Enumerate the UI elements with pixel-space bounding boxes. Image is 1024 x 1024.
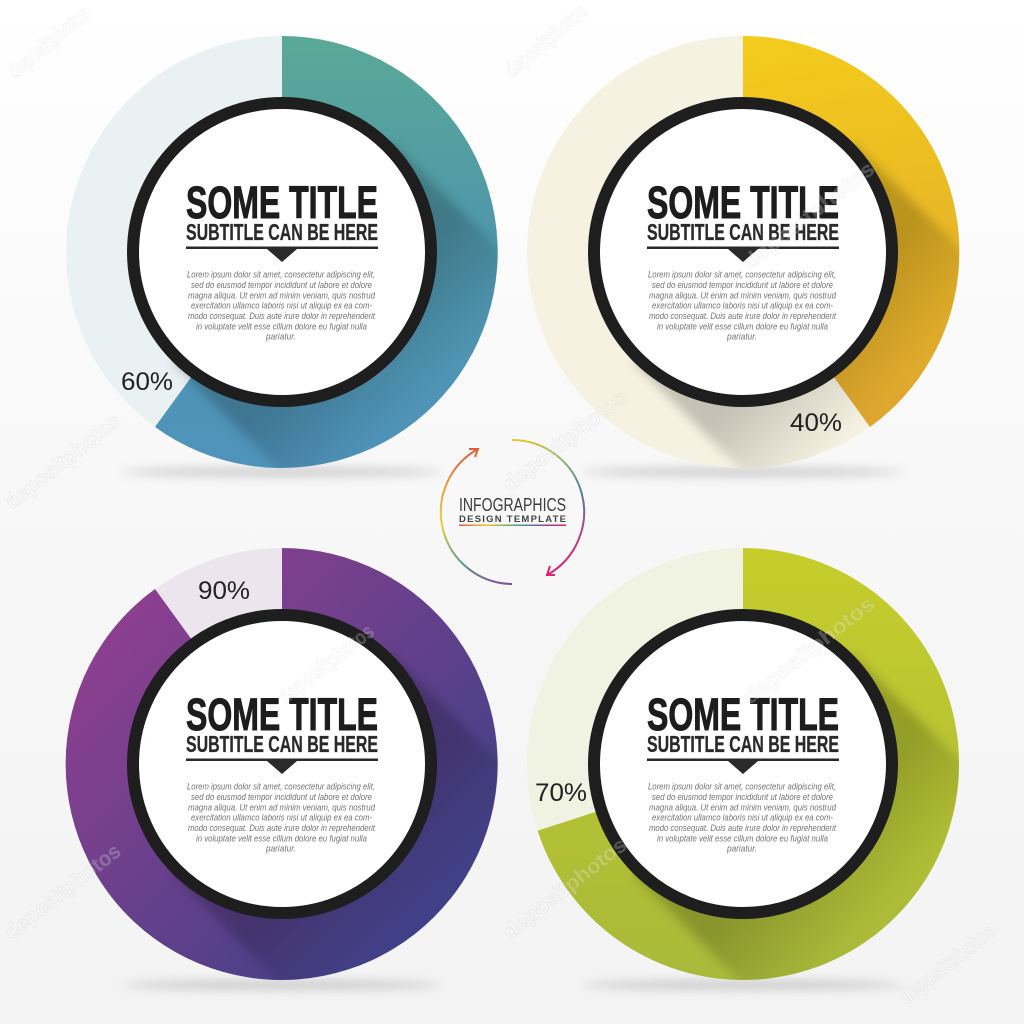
title: SOME TITLE bbox=[647, 177, 839, 228]
ground shadow: top left bbox=[122, 468, 442, 476]
title: SOME TITLE bbox=[186, 689, 378, 740]
watermarks: depositphotos bbox=[739, 592, 879, 709]
inner circle bbox=[133, 103, 431, 401]
body text: Lorem ipsum dolor sit amet, consectetur adipiscing elit, bbox=[648, 270, 836, 280]
ground shadow: bottom left bbox=[122, 981, 442, 989]
panel: 90% donut bbox=[66, 548, 498, 980]
body text: Lorem ipsum dolor sit amet, consectetur adipiscing elit, bbox=[187, 270, 375, 280]
track bbox=[527, 36, 959, 468]
body text bbox=[187, 782, 376, 854]
pointer rule bbox=[647, 246, 839, 262]
subtitle: SUBTITLE CAN BE HERE bbox=[647, 731, 839, 757]
body text: magna aliqua. Ut enim ad minim veniam, quis nostrud bbox=[188, 290, 376, 300]
percent label: 60% bbox=[121, 368, 173, 396]
body text: pariatur. bbox=[265, 332, 296, 342]
pointer rule bbox=[186, 246, 378, 262]
title: SOME TITLE bbox=[186, 177, 378, 228]
track bbox=[66, 548, 498, 980]
pointer rule bbox=[186, 758, 378, 774]
title: SOME TITLE bbox=[647, 689, 839, 740]
body text: exercitation ullamco laboris nisi ut aliquip ex ea com- bbox=[191, 301, 372, 311]
arrow: right arc bbox=[512, 440, 584, 575]
center badge bbox=[441, 440, 584, 584]
body text: pariatur. bbox=[726, 844, 757, 854]
percent label: 90% bbox=[198, 577, 250, 605]
inner circle bbox=[594, 615, 892, 913]
body text: modo consequat. Duis aute irure dolor in reprehenderit bbox=[188, 311, 375, 321]
watermarks: depositphotos bbox=[274, 620, 379, 709]
body text: sed do eiusmod tempor incididunt ut labore et dolore bbox=[652, 792, 833, 802]
arrow: left arc bbox=[441, 449, 512, 584]
track bbox=[527, 548, 959, 980]
body text: modo consequat. Duis aute irure dolor in reprehenderit bbox=[649, 311, 836, 321]
long shadow bbox=[173, 655, 498, 980]
long shadow bbox=[170, 142, 498, 468]
inner circle bbox=[133, 615, 431, 913]
body text: modo consequat. Duis aute irure dolor in reprehenderit bbox=[188, 823, 375, 833]
body text: magna aliqua. Ut enim ad minim veniam, quis nostrud bbox=[649, 290, 837, 300]
watermarks: depositphotos bbox=[895, 920, 1000, 1009]
watermarks: depositphotos bbox=[1, 410, 125, 514]
inner circle bbox=[594, 103, 892, 401]
body text: magna aliqua. Ut enim ad minim veniam, quis nostrud bbox=[188, 802, 376, 812]
body text: exercitation ullamco laboris nisi ut aliquip ex ea com- bbox=[191, 813, 372, 823]
subtitle: SUBTITLE CAN BE HERE bbox=[647, 219, 839, 245]
watermarks: depositphotos bbox=[499, 385, 631, 496]
body text: sed do eiusmod tempor incididunt ut labore et dolore bbox=[191, 792, 372, 802]
body text: sed do eiusmod tempor incididunt ut labore et dolore bbox=[652, 280, 833, 290]
track bbox=[66, 36, 498, 468]
body text: Lorem ipsum dolor sit amet, consectetur adipiscing elit, bbox=[648, 782, 836, 792]
watermarks: depositphotos bbox=[1, 840, 125, 944]
value wedge 90% bbox=[66, 548, 498, 980]
body text: in voluptate velit esse cillum dolore eu fugiat nulla bbox=[196, 321, 367, 331]
body text: modo consequat. Duis aute irure dolor in reprehenderit bbox=[649, 823, 836, 833]
body text: in voluptate velit esse cillum dolore eu fugiat nulla bbox=[196, 833, 367, 843]
badge title: INFOGRAPHICS bbox=[459, 495, 566, 515]
subtitle: SUBTITLE CAN BE HERE bbox=[186, 219, 378, 245]
body text: in voluptate velit esse cillum dolore eu fugiat nulla bbox=[657, 321, 828, 331]
panel: 60% donut bbox=[66, 36, 498, 468]
body text: pariatur. bbox=[726, 332, 757, 342]
subtitle: SUBTITLE CAN BE HERE bbox=[186, 731, 378, 757]
panel: 70% donut bbox=[527, 548, 960, 980]
body text: magna aliqua. Ut enim ad minim veniam, quis nostrud bbox=[649, 802, 837, 812]
body text: pariatur. bbox=[265, 844, 296, 854]
watermarks: depositphotos bbox=[499, 833, 631, 944]
percent label: 40% bbox=[790, 409, 842, 437]
watermarks: depositphotos bbox=[739, 157, 879, 274]
body text: in voluptate velit esse cillum dolore eu fugiat nulla bbox=[657, 833, 828, 843]
value wedge 70% bbox=[538, 548, 959, 980]
value wedge 40% bbox=[743, 36, 959, 427]
rainbow rule bbox=[459, 524, 566, 526]
badge subtitle: DESIGN TEMPLATE bbox=[459, 514, 566, 525]
pointer rule bbox=[647, 758, 839, 774]
value wedge 60% bbox=[155, 36, 498, 468]
long shadow bbox=[632, 653, 959, 980]
body text bbox=[648, 270, 837, 342]
body text: exercitation ullamco laboris nisi ut aliquip ex ea com- bbox=[652, 301, 833, 311]
percent label: 70% bbox=[535, 779, 587, 807]
ground shadow: bottom right bbox=[583, 981, 903, 989]
long shadow bbox=[632, 141, 959, 468]
body text: exercitation ullamco laboris nisi ut aliquip ex ea com- bbox=[652, 813, 833, 823]
body text bbox=[648, 782, 837, 854]
body text: sed do eiusmod tempor incididunt ut labore et dolore bbox=[191, 280, 372, 290]
body text bbox=[187, 270, 376, 342]
panel: 40% donut bbox=[527, 36, 960, 468]
body text: Lorem ipsum dolor sit amet, consectetur adipiscing elit, bbox=[187, 782, 375, 792]
ground shadow: top right bbox=[583, 468, 903, 476]
